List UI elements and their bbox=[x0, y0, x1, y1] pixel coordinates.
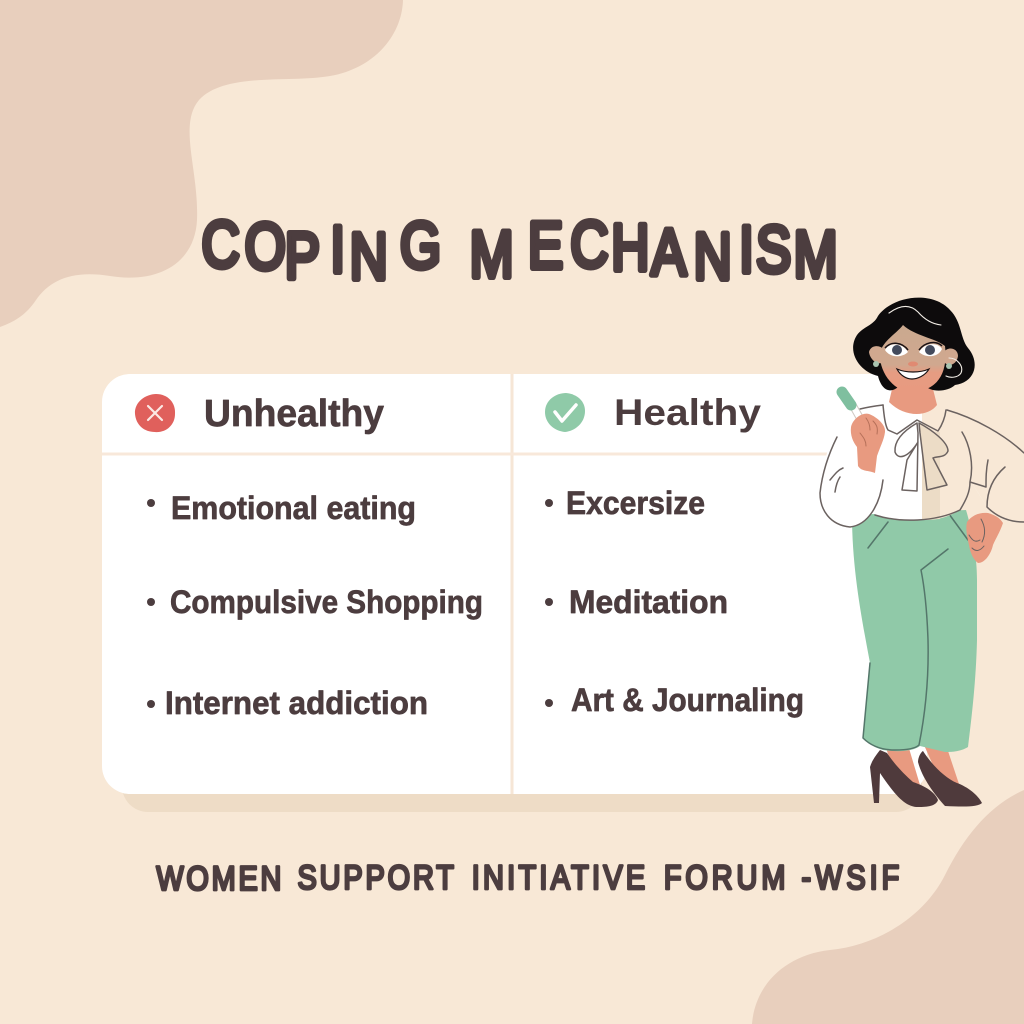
shirt shaded strip bbox=[922, 432, 940, 520]
pen bbox=[842, 392, 861, 420]
item: emotional eating: Emotional eating bbox=[171, 490, 416, 526]
item: internet addiction: Internet addiction bbox=[165, 685, 428, 721]
shirt cream half bbox=[922, 403, 1024, 522]
shirt bbox=[820, 405, 1024, 527]
shoes bbox=[870, 750, 982, 807]
table card bbox=[102, 374, 927, 812]
column divider bbox=[510, 374, 514, 794]
column: healthy bbox=[545, 392, 804, 718]
hair highlights bbox=[889, 306, 962, 377]
icon: red cross bbox=[135, 394, 175, 432]
footer text: FORUM bbox=[664, 858, 785, 897]
smile bbox=[897, 369, 929, 379]
hand: raised bbox=[851, 414, 885, 473]
item: compulsive shopping: Compulsive Shopping bbox=[170, 584, 483, 620]
footer text bbox=[156, 858, 899, 898]
shirt outline bbox=[820, 405, 1024, 527]
heading: healthy: Healthy bbox=[614, 392, 761, 433]
bow bbox=[895, 423, 948, 491]
leg skin bbox=[885, 745, 961, 792]
face bbox=[880, 325, 946, 391]
heading: unhealthy: Unhealthy bbox=[204, 393, 384, 435]
ears and earrings bbox=[869, 346, 958, 369]
title: COPING MECHANISM bbox=[202, 207, 838, 293]
footer text: SUPPORT bbox=[298, 858, 454, 897]
illustration: woman bbox=[820, 298, 1024, 807]
header divider bbox=[102, 452, 927, 456]
nose bbox=[908, 362, 918, 366]
item: art and journaling: Art & Journaling bbox=[571, 682, 804, 718]
column: unhealthy bbox=[135, 393, 483, 721]
item: meditation: Meditation bbox=[569, 584, 728, 620]
card panel bbox=[102, 374, 927, 794]
blob: bottom right bbox=[752, 790, 1024, 1024]
collar bbox=[883, 405, 946, 434]
trouser lines bbox=[863, 514, 968, 750]
trousers bbox=[852, 510, 977, 752]
blob: top left bbox=[0, 0, 403, 327]
footer text: WOMEN bbox=[156, 859, 281, 898]
item: excersize: Excersize bbox=[566, 485, 705, 521]
icon: green check bbox=[545, 393, 585, 432]
neck bbox=[889, 385, 937, 414]
hand: on hip bbox=[966, 513, 1003, 563]
eyes bbox=[885, 343, 942, 356]
hair bbox=[853, 298, 975, 391]
footer text: INITIATIVE bbox=[472, 858, 645, 897]
footer text: -WSIF bbox=[802, 858, 899, 897]
card shadow bbox=[122, 392, 922, 812]
